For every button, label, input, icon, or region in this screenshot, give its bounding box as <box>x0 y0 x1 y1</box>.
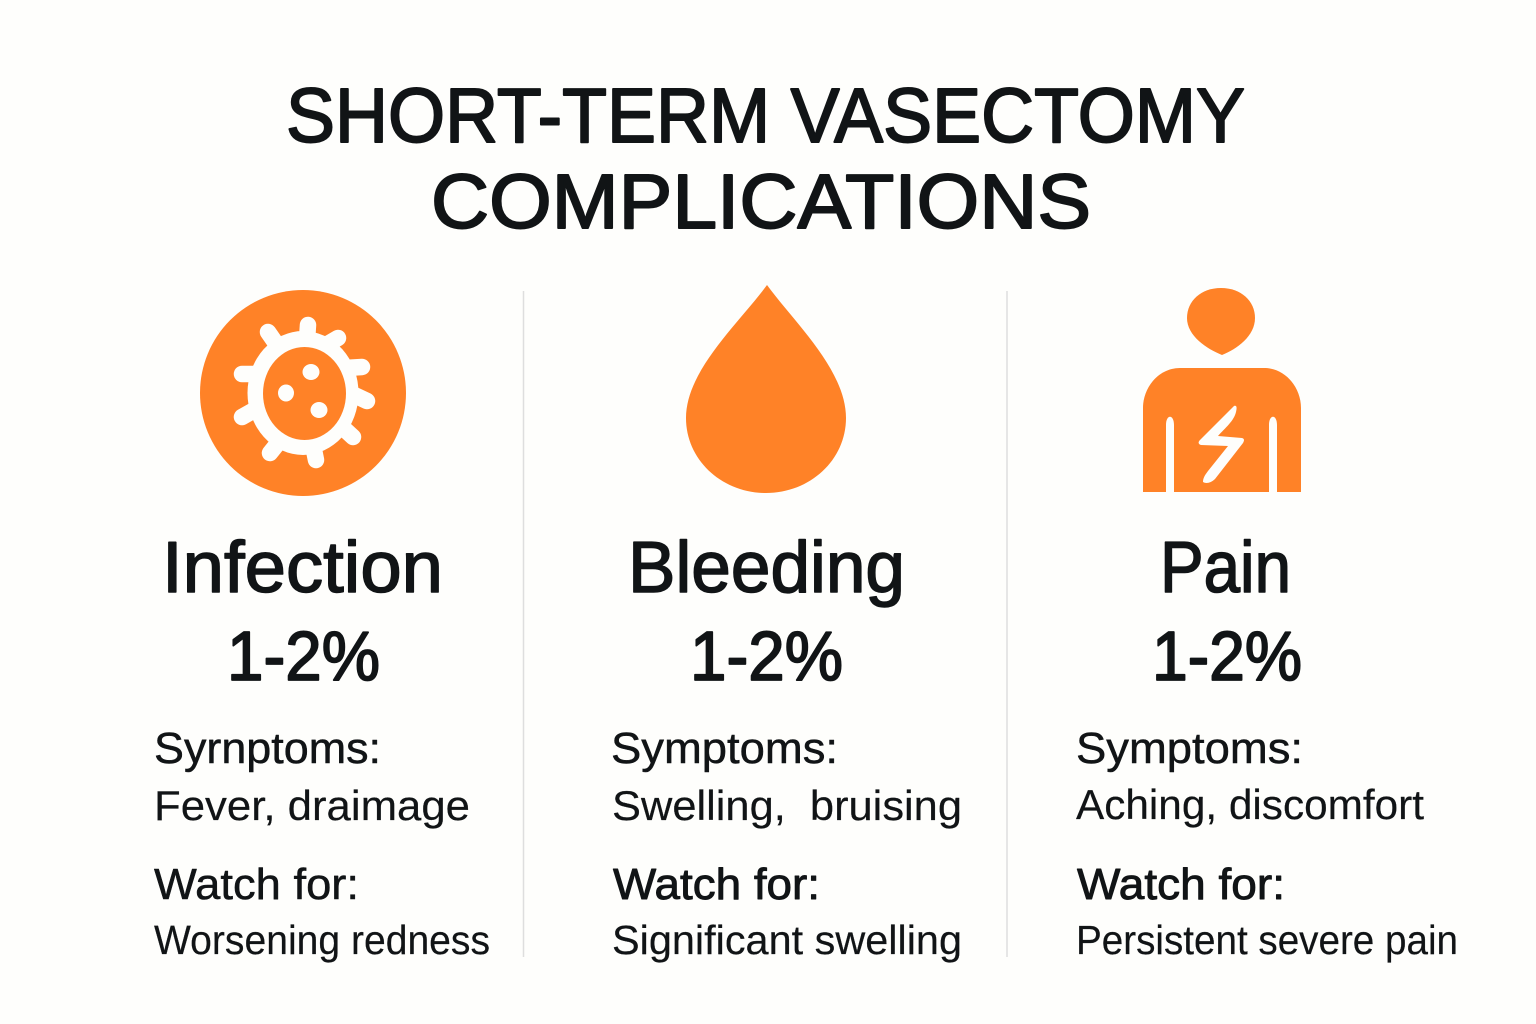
text: pain symptoms <box>1076 724 1424 828</box>
title <box>286 73 1245 245</box>
text: infection symptoms: Syrnptoms: <box>154 724 381 773</box>
heading: pain: Pain <box>1160 528 1291 608</box>
text: bleeding symptoms <box>611 724 962 829</box>
stat: bleeding rate: 1-2% <box>690 617 843 695</box>
icon: virus in orange circle <box>200 290 406 496</box>
text: pain symptoms: Symptoms: <box>1076 724 1303 773</box>
text: infection symptoms: Fever, draimage <box>154 782 470 829</box>
text: pain watch for <box>1076 860 1458 963</box>
text: pain watch for: Watch for: <box>1077 860 1285 909</box>
stat: pain rate: 1-2% <box>1152 617 1302 695</box>
text: infection watch for: Worsening redness <box>154 917 490 963</box>
text: infection symptoms <box>154 724 470 829</box>
text: infection watch for <box>154 860 490 963</box>
heading: bleeding: Bleeding <box>628 528 905 608</box>
text: infection watch for: Watch for: <box>154 860 359 909</box>
text: pain watch for: Persistent severe pain <box>1076 917 1458 963</box>
panel: bleeding <box>611 285 962 963</box>
text: bleeding watch for: Watch for: <box>613 860 820 909</box>
icon: blood drop <box>686 285 846 493</box>
text: bleeding watch for: Significant swelling <box>612 917 962 963</box>
title: COMPLICATIONS <box>431 159 1091 245</box>
title: SHORT-TERM VASECTOMY <box>286 73 1245 159</box>
panel: pain <box>1076 288 1458 963</box>
text: bleeding symptoms: Symptoms: <box>611 724 838 773</box>
text: pain symptoms: Aching, discomfort <box>1076 781 1424 828</box>
text: bleeding symptoms: Swelling, bruising <box>612 782 962 829</box>
icon: person with lightning bolt <box>1143 288 1301 492</box>
panel: infection <box>154 290 490 963</box>
stat: infection rate: 1-2% <box>227 617 380 695</box>
text: bleeding watch for <box>612 860 962 963</box>
heading: infection: Infection <box>162 528 443 608</box>
